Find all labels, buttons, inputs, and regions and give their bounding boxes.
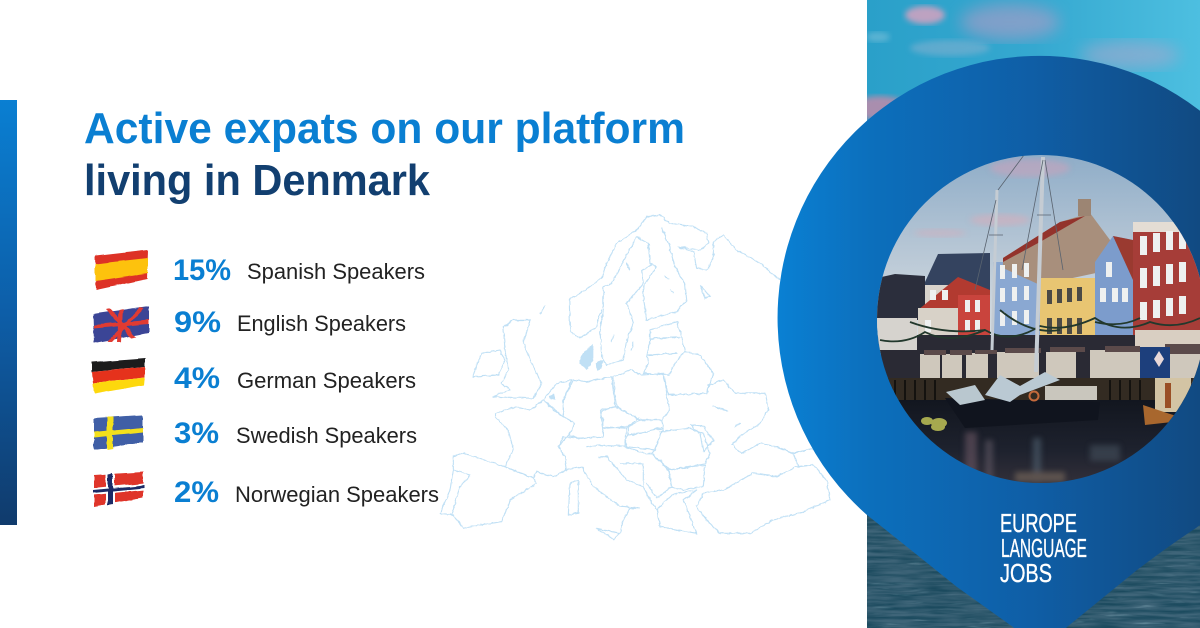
windows [925,230,1186,332]
accent bar [0,100,17,525]
icon: Germany flag [92,358,145,394]
row: German speakers [92,358,416,395]
row: English speakers: English Speakers [237,311,406,336]
row: English speakers: 9% [174,306,221,339]
ground floor [877,335,1200,390]
garlands [880,310,1200,341]
circular photo: Nyhavn harbour [877,155,1200,485]
row: Norwegian speakers [93,472,439,509]
pier [888,378,1200,402]
small boat [1155,378,1191,412]
row: German speakers: 4% [174,362,220,395]
location pin [778,56,1200,628]
water [898,400,1184,483]
title [84,104,685,205]
logo: Europe Language Jobs [1000,508,1087,588]
logo: Europe Language Jobs: JOBS [1000,558,1052,588]
logo: Europe Language Jobs: EUROPE [1000,508,1077,538]
title: living in Denmark [84,156,430,205]
row: Spanish speakers: Spanish Speakers [247,259,425,284]
row: Spanish speakers: 15% [173,254,231,287]
title: Active expats on our platform [84,104,685,153]
boat [945,398,1073,428]
icon: Spain flag [95,250,148,290]
masts [992,157,1043,372]
row: Swedish speakers: Swedish Speakers [236,423,417,448]
row: Swedish speakers: 3% [174,417,219,450]
buoys [921,417,947,431]
row: English speakers [93,306,406,343]
row: Swedish speakers [94,415,417,450]
logo: Europe Language Jobs: LANGUAGE [1001,533,1087,563]
map of Europe [440,215,830,539]
huts [920,350,1140,378]
row: German speakers: German Speakers [237,368,416,393]
row: Norwegian speakers: 2% [174,476,219,509]
icon: Norway flag [93,472,144,507]
row: Spanish speakers [95,250,425,290]
row: Norwegian speakers: Norwegian Speakers [235,482,439,507]
houses [877,274,925,320]
background photo: sky and water [852,0,1200,628]
icon: Sweden flag [94,415,143,450]
icon: UK flag [93,306,149,343]
